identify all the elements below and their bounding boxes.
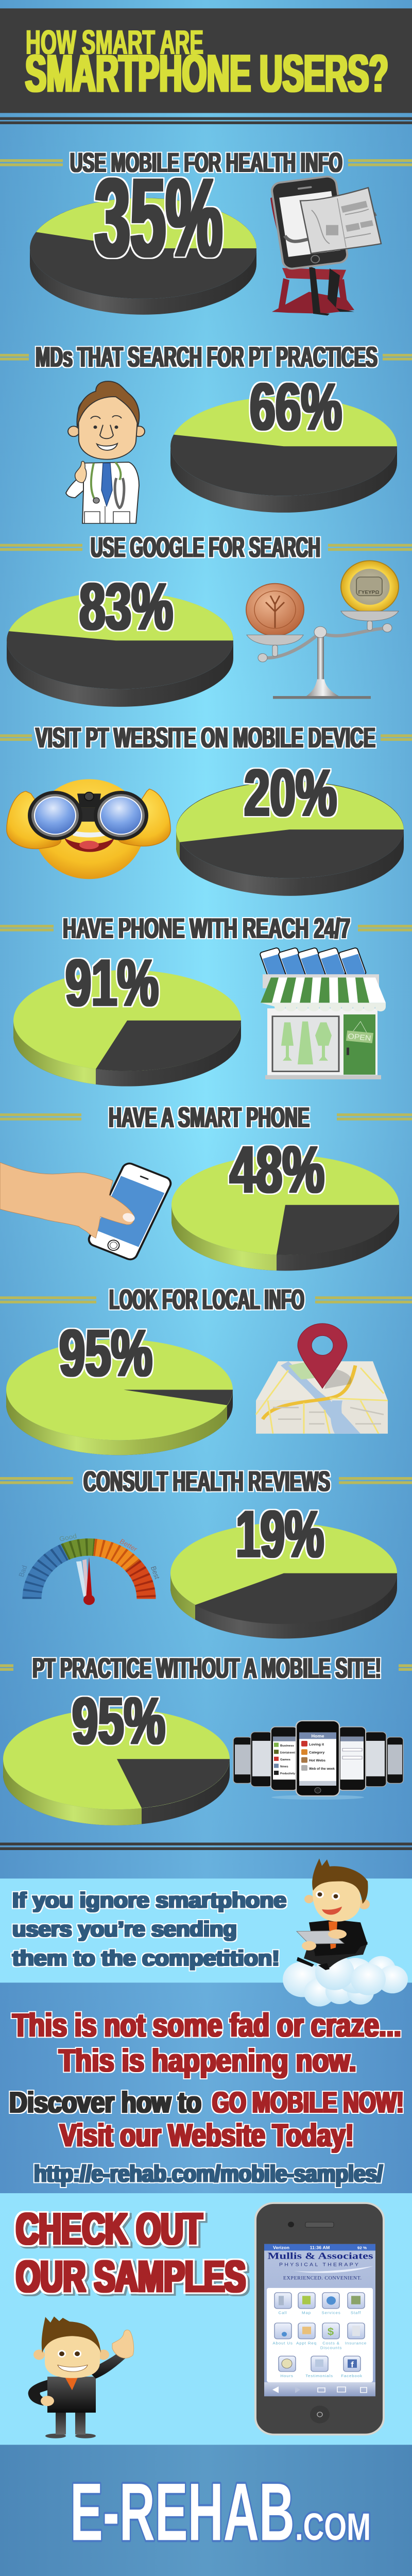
icon: row of phones with apps: Entertainment: [280, 1752, 295, 1754]
icon: cartoon doctor: [66, 381, 145, 523]
app labels: Staff: [351, 2311, 361, 2315]
pie chart: 95% no mobile site: [3, 1708, 230, 1825]
cloud: [283, 1955, 408, 2007]
door with open sign: [344, 1014, 375, 1075]
door with open sign: OPEN: [347, 1032, 371, 1043]
pie chart: 35%: [30, 198, 256, 315]
icon: businessman thumbs up: [28, 2316, 134, 2438]
copper coin: [246, 584, 304, 636]
app labels: Facebook: [341, 2374, 363, 2378]
message: this is not some fad: [12, 2007, 401, 2078]
icon: row of phones with apps: Hot Webs: [309, 1759, 325, 1762]
check out heading: OUR SAMPLES: [16, 2252, 246, 2300]
icon: row of phones with apps: Category: [309, 1751, 325, 1754]
icon: row of phones with apps: News: [280, 1766, 288, 1768]
app labels: Appt Req: [296, 2341, 317, 2345]
row of phones: [260, 947, 367, 979]
icon: rating gauge: Good: [59, 1532, 77, 1543]
gold coin: ΓΥΕΥΡΩ: [358, 590, 380, 595]
icon: balance scale with coins: [246, 561, 399, 699]
phone screen: 11:36 AM: [310, 2245, 330, 2250]
app icon grid: [274, 2293, 365, 2371]
app labels: About Us: [272, 2341, 293, 2345]
gold coin: [341, 561, 399, 613]
logo: E-REHAB.com: .COM: [295, 2505, 371, 2548]
title banner: [0, 8, 412, 124]
icon: businessman with tablet on cloud: [283, 1858, 408, 2007]
phone screen: [264, 2244, 375, 2396]
icon: rating gauge: Bad: [17, 1565, 29, 1578]
check out heading: [16, 2205, 246, 2300]
needle: [76, 1557, 95, 1605]
callout text: If you ignore smartphone: [12, 1888, 286, 1912]
icon: row of phones with apps: Loving it: [309, 1743, 324, 1747]
app labels: Hours: [280, 2374, 294, 2378]
percentage: 66%: 66%: [250, 369, 342, 444]
pie chart: 66%: [170, 397, 397, 513]
icon: storefront with phones: [260, 947, 386, 1079]
phone screen: Mullis & Associates: [268, 2251, 373, 2261]
phone screen: EXPERIENCED. CONVENIENT.: [283, 2276, 362, 2281]
pie chart: 48%: [171, 1155, 399, 1270]
pie chart: 19%: [170, 1523, 397, 1639]
pie chart: 20%: [176, 781, 404, 896]
phone screen: Verizon: [273, 2245, 289, 2250]
icon: rating gauge: [17, 1532, 161, 1605]
app labels: [272, 2311, 367, 2378]
app labels: Insurance: [345, 2341, 367, 2345]
percentage: 83%: 83%: [79, 569, 173, 643]
panel: ignore smartphone users: [0, 1878, 412, 1982]
percentage: 95% local info: 95%: [59, 1316, 152, 1390]
phone screen: $: [328, 2326, 334, 2337]
phone screen: PHYSICAL THERAPY: [279, 2262, 358, 2267]
pie chart: 83%: [7, 592, 233, 707]
app labels: Services: [321, 2311, 341, 2315]
percentage: 35%: 35%: [95, 156, 222, 280]
callout text: users you’re sending: [12, 1918, 237, 1941]
callout text: them to the competition!: [12, 1946, 280, 1970]
icon: row of phones with apps: Games: [280, 1758, 290, 1761]
icon: rating gauge: Best: [149, 1565, 161, 1580]
pie chart: 91%: [13, 970, 241, 1087]
icon: map with location pin: [256, 1324, 388, 1434]
folded map: [256, 1361, 388, 1434]
percentage: 91%: 91%: [65, 945, 159, 1020]
percentage: 48%: 48%: [230, 1132, 324, 1207]
phone screen: 92 %: [357, 2246, 367, 2250]
call to action: go mobile now: [9, 2086, 404, 2153]
shop window: [272, 1016, 339, 1072]
app labels: Call: [279, 2311, 287, 2315]
footer panel: [0, 2445, 412, 2576]
app labels: Testimonials: [305, 2374, 333, 2378]
app labels: Costs &: [322, 2341, 340, 2345]
icon: row of phones with apps: Web of the week: [309, 1767, 335, 1771]
app labels: Map: [302, 2311, 311, 2315]
panel: check out our samples: [0, 2193, 412, 2445]
icon: smiley with binoculars: [7, 779, 170, 879]
pie chart: 95% local info: [6, 1340, 233, 1455]
icon: row of phones with apps: Business: [280, 1744, 294, 1748]
icon: row of phones with apps: Productivity: [280, 1772, 296, 1775]
icon: rating gauge: Better: [118, 1537, 139, 1553]
phone mockup with sample site: [255, 2203, 384, 2434]
percentage: 20%: 20%: [244, 755, 337, 830]
percentage: 95% no mobile site: 95%: [72, 1684, 165, 1758]
icon: row of phones with apps: [233, 1721, 403, 1800]
location pin: [298, 1324, 347, 1388]
divider bars: [0, 1842, 412, 1850]
app labels: Discounts: [320, 2346, 342, 2350]
callout text: [12, 1888, 286, 1970]
icon: row of phones with apps: Home: [312, 1734, 324, 1738]
check out heading: CHECK OUT: [16, 2205, 202, 2253]
call to action: go mobile now: Discover how to: [9, 2086, 201, 2119]
title line 1: HOW SMART ARE: [26, 23, 203, 61]
phone screen: f: [351, 2361, 354, 2369]
icon: phone on chair reading newspaper: [270, 176, 381, 316]
icon: hand holding phone: [0, 1161, 173, 1261]
percentage: 19%: 19%: [236, 1497, 324, 1571]
